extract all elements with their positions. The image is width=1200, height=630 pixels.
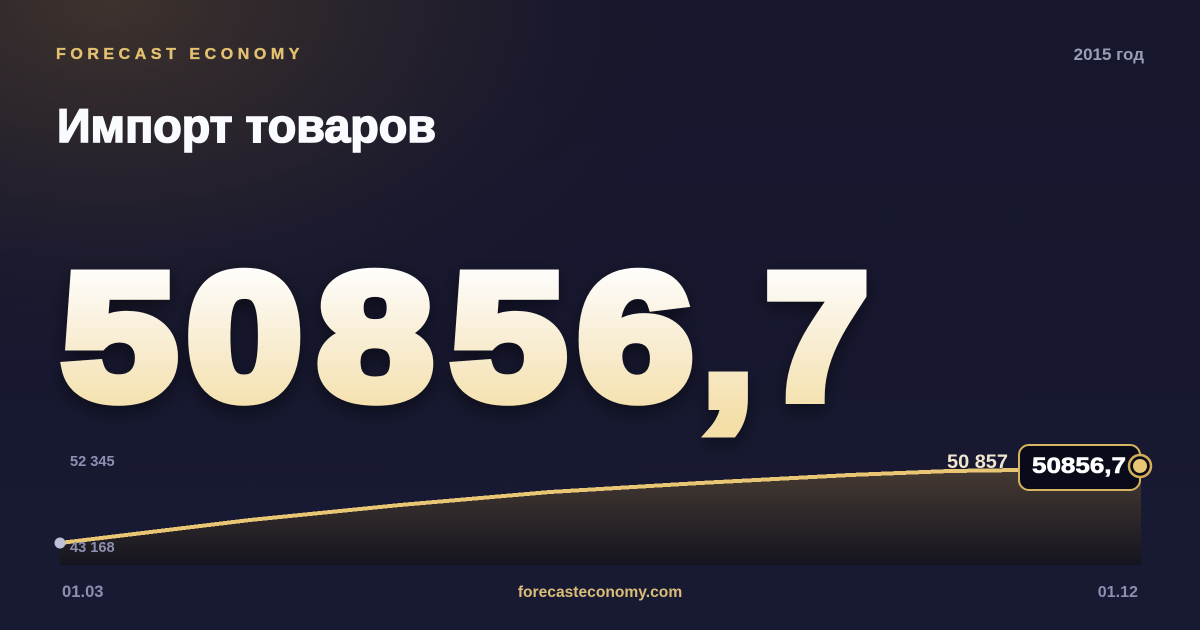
big number: 50856 [62, 236, 693, 436]
chart line [60, 470, 1020, 543]
big number: 7 [765, 238, 868, 436]
axis min label: 43 168 [70, 540, 115, 556]
value pill: 50856,7 [1032, 453, 1126, 478]
big number: , [702, 243, 754, 442]
start date: 01.03 [62, 582, 104, 601]
end point marker [1129, 455, 1151, 477]
end date: 01.12 [1098, 583, 1138, 601]
value pill [1019, 445, 1140, 490]
chart [54, 445, 1151, 565]
axis max label: 52 345 [70, 454, 115, 470]
eyebrow: brand name: FORECAST ECONOMY [56, 46, 304, 63]
chart area fill [60, 468, 1141, 565]
title: Импорт товаров [57, 99, 436, 152]
chart start point [54, 538, 66, 548]
year label: 2015 год [1074, 45, 1144, 64]
site url: forecasteconomy.com [518, 584, 682, 601]
last value label: 50 857 [947, 452, 1008, 473]
